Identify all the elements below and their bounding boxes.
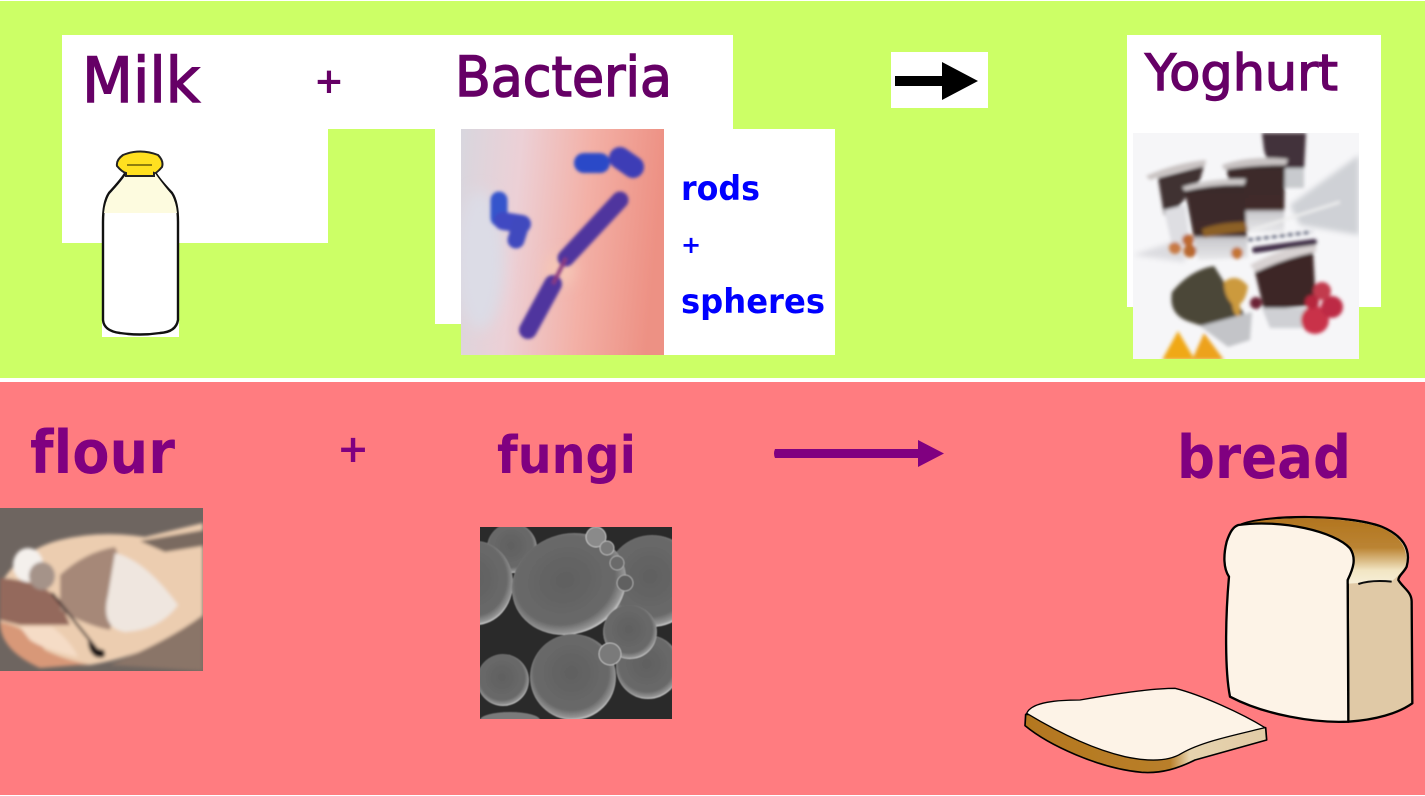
- arrow: black: [895, 62, 978, 100]
- front-middle pot: [1184, 182, 1248, 260]
- slice top: [1027, 688, 1265, 760]
- flour pile lit side: [106, 553, 178, 632]
- heading: bread: bread: [1177, 423, 1351, 493]
- image: yeast micrograph: [480, 527, 672, 719]
- rod chain: [528, 284, 553, 330]
- image: bacteria micrograph: [456, 129, 664, 355]
- spheres left: [490, 200, 508, 218]
- raspberries: [1301, 306, 1329, 334]
- panel: yoghurt white label area: [1127, 35, 1381, 359]
- plate: [0, 523, 203, 665]
- heading: Milk: Milk: [82, 44, 200, 117]
- flour pile shaded side: [60, 547, 125, 630]
- panel: milk and bacteria white label area: [62, 35, 835, 355]
- back pot: [1262, 133, 1306, 170]
- slice edge: [1025, 714, 1267, 773]
- plus sign: rods and spheres: +: [681, 231, 701, 259]
- left pot: [1158, 166, 1204, 215]
- plus sign: milk and bacteria: +: [314, 61, 344, 102]
- spoon: [13, 548, 43, 582]
- panel: yoghurt background: [0, 1, 1425, 378]
- heading: Yoghurt: Yoghurt: [1144, 44, 1338, 102]
- bottom-right dark corner: [110, 615, 203, 671]
- panel: bread background: [0, 382, 1425, 795]
- text: rods: rods: [681, 169, 760, 209]
- shaded left rim: [0, 578, 70, 625]
- loaf crust and side: [1242, 517, 1412, 722]
- right front pot: [1254, 250, 1316, 310]
- image: flour photo: [0, 508, 203, 671]
- heading: fungi: fungi: [497, 426, 636, 486]
- icon: milk bottle: [102, 152, 179, 337]
- loaf front: [1224, 523, 1354, 722]
- tipped pot: [1171, 266, 1248, 328]
- right-middle pot: [1226, 160, 1285, 232]
- image: yoghurt pots photo: [1133, 133, 1359, 360]
- spheres top: [584, 153, 600, 173]
- text: spheres: spheres: [681, 282, 825, 322]
- panel: arrow white box: [891, 52, 988, 108]
- plus sign: flour and fungi: +: [337, 427, 369, 471]
- heading: flour: flour: [30, 418, 175, 488]
- orange wedges: [1162, 331, 1195, 360]
- heading: Bacteria: Bacteria: [455, 45, 672, 109]
- nuts: [1182, 234, 1194, 246]
- icon: bread loaf and slice: [1025, 517, 1412, 773]
- spoon: [1260, 200, 1340, 228]
- arrow: purple: [774, 440, 944, 467]
